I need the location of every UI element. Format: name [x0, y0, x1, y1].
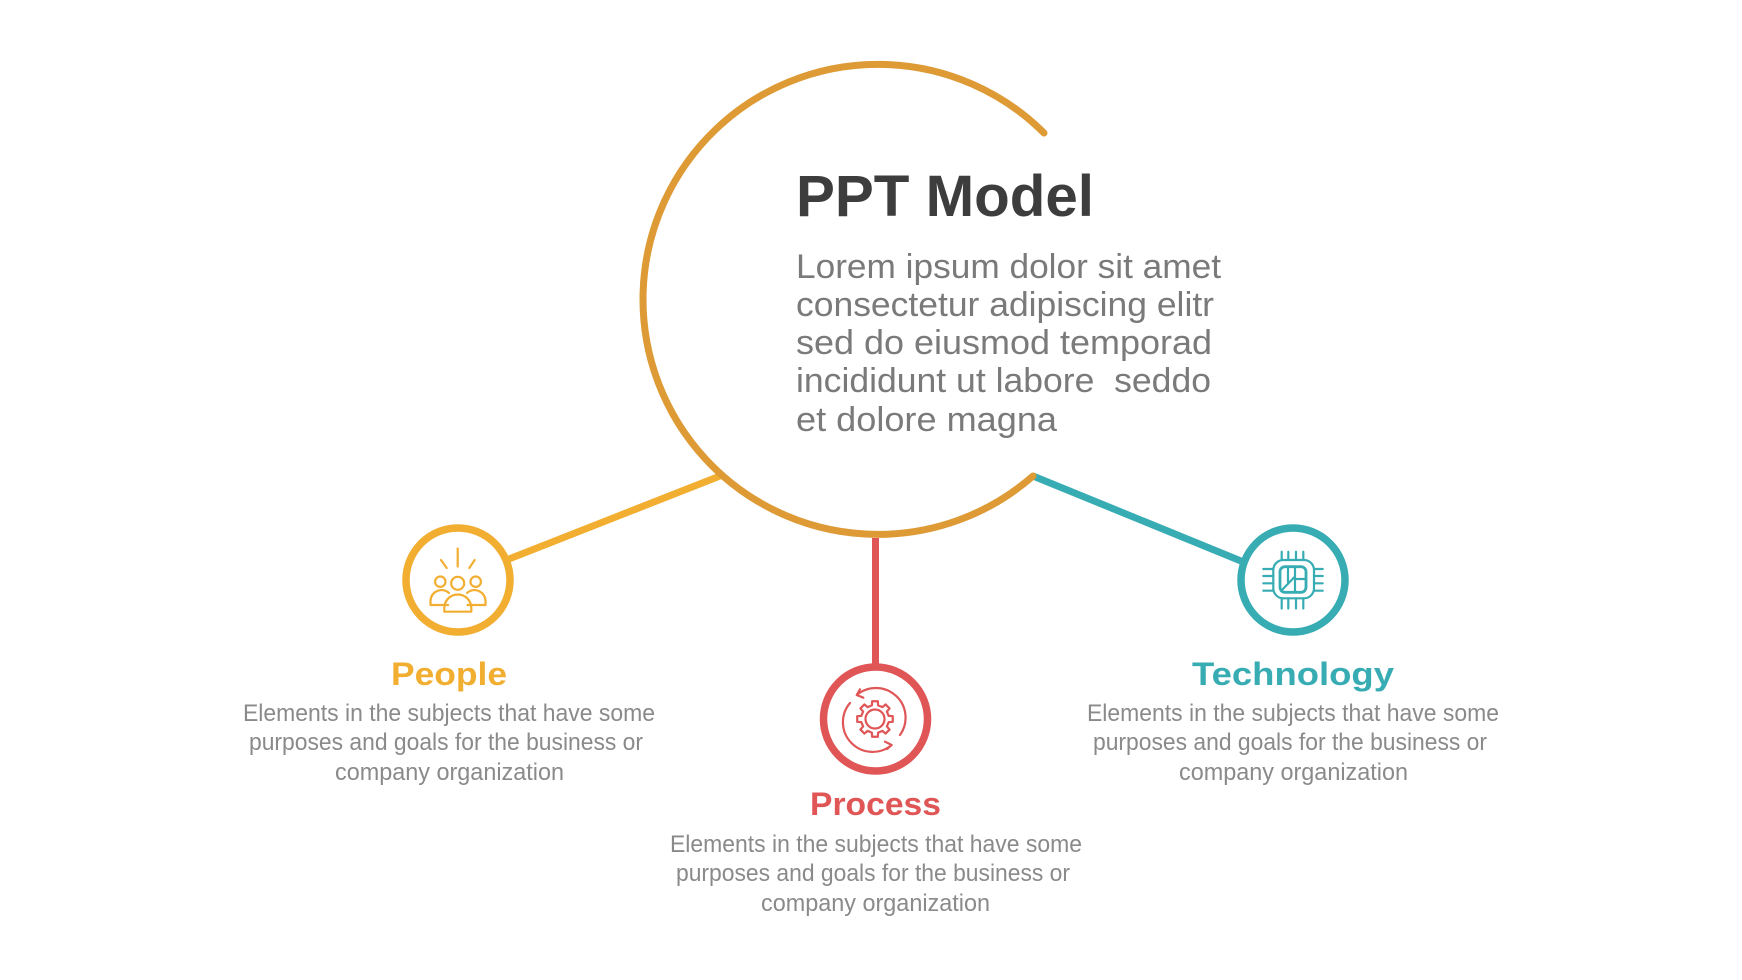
description: technology [1087, 700, 1499, 786]
main text block: Lorem ipsum dolor sit amet [796, 248, 1222, 286]
panel: process [670, 667, 1082, 917]
description: process [670, 831, 1082, 917]
description: people: purposes and goals for the business or [249, 729, 643, 756]
title: PPT Model [796, 164, 1094, 229]
main text block: sed do eiusmod temporad [796, 324, 1212, 362]
description: process: Elements in the subjects that have some [670, 831, 1082, 858]
description: people: company organization [335, 759, 564, 786]
description: process: purposes and goals for the business or [676, 860, 1070, 887]
icon: gear with cycle arrows [843, 688, 906, 752]
icon ring: process [824, 667, 928, 771]
label: process: Process [810, 786, 941, 822]
icon: people group [430, 548, 486, 612]
description: process: company organization [761, 890, 990, 917]
icon ring: technology [1241, 528, 1345, 632]
main text block: incididunt ut labore seddo [796, 362, 1211, 400]
icon: microchip [1263, 552, 1323, 608]
description: people [243, 700, 655, 786]
description: technology: purposes and goals for the business or [1093, 729, 1487, 756]
connector: process [872, 538, 879, 668]
panel: people [243, 528, 655, 786]
description: technology: company organization [1179, 759, 1408, 786]
label: technology: Technology [1192, 656, 1394, 692]
panel: technology [1087, 528, 1499, 786]
description: people: Elements in the subjects that have some [243, 700, 655, 727]
main open ring [643, 64, 1044, 534]
main text block: et dolore magna [796, 401, 1057, 439]
connector: technology [1033, 476, 1241, 561]
label: people: People [391, 656, 507, 692]
description: technology: Elements in the subjects that have some [1087, 700, 1499, 727]
connector: people [509, 476, 720, 559]
icon ring: people [406, 528, 510, 632]
main text block [796, 248, 1222, 439]
main text block: consectetur adipiscing elitr [796, 286, 1214, 324]
